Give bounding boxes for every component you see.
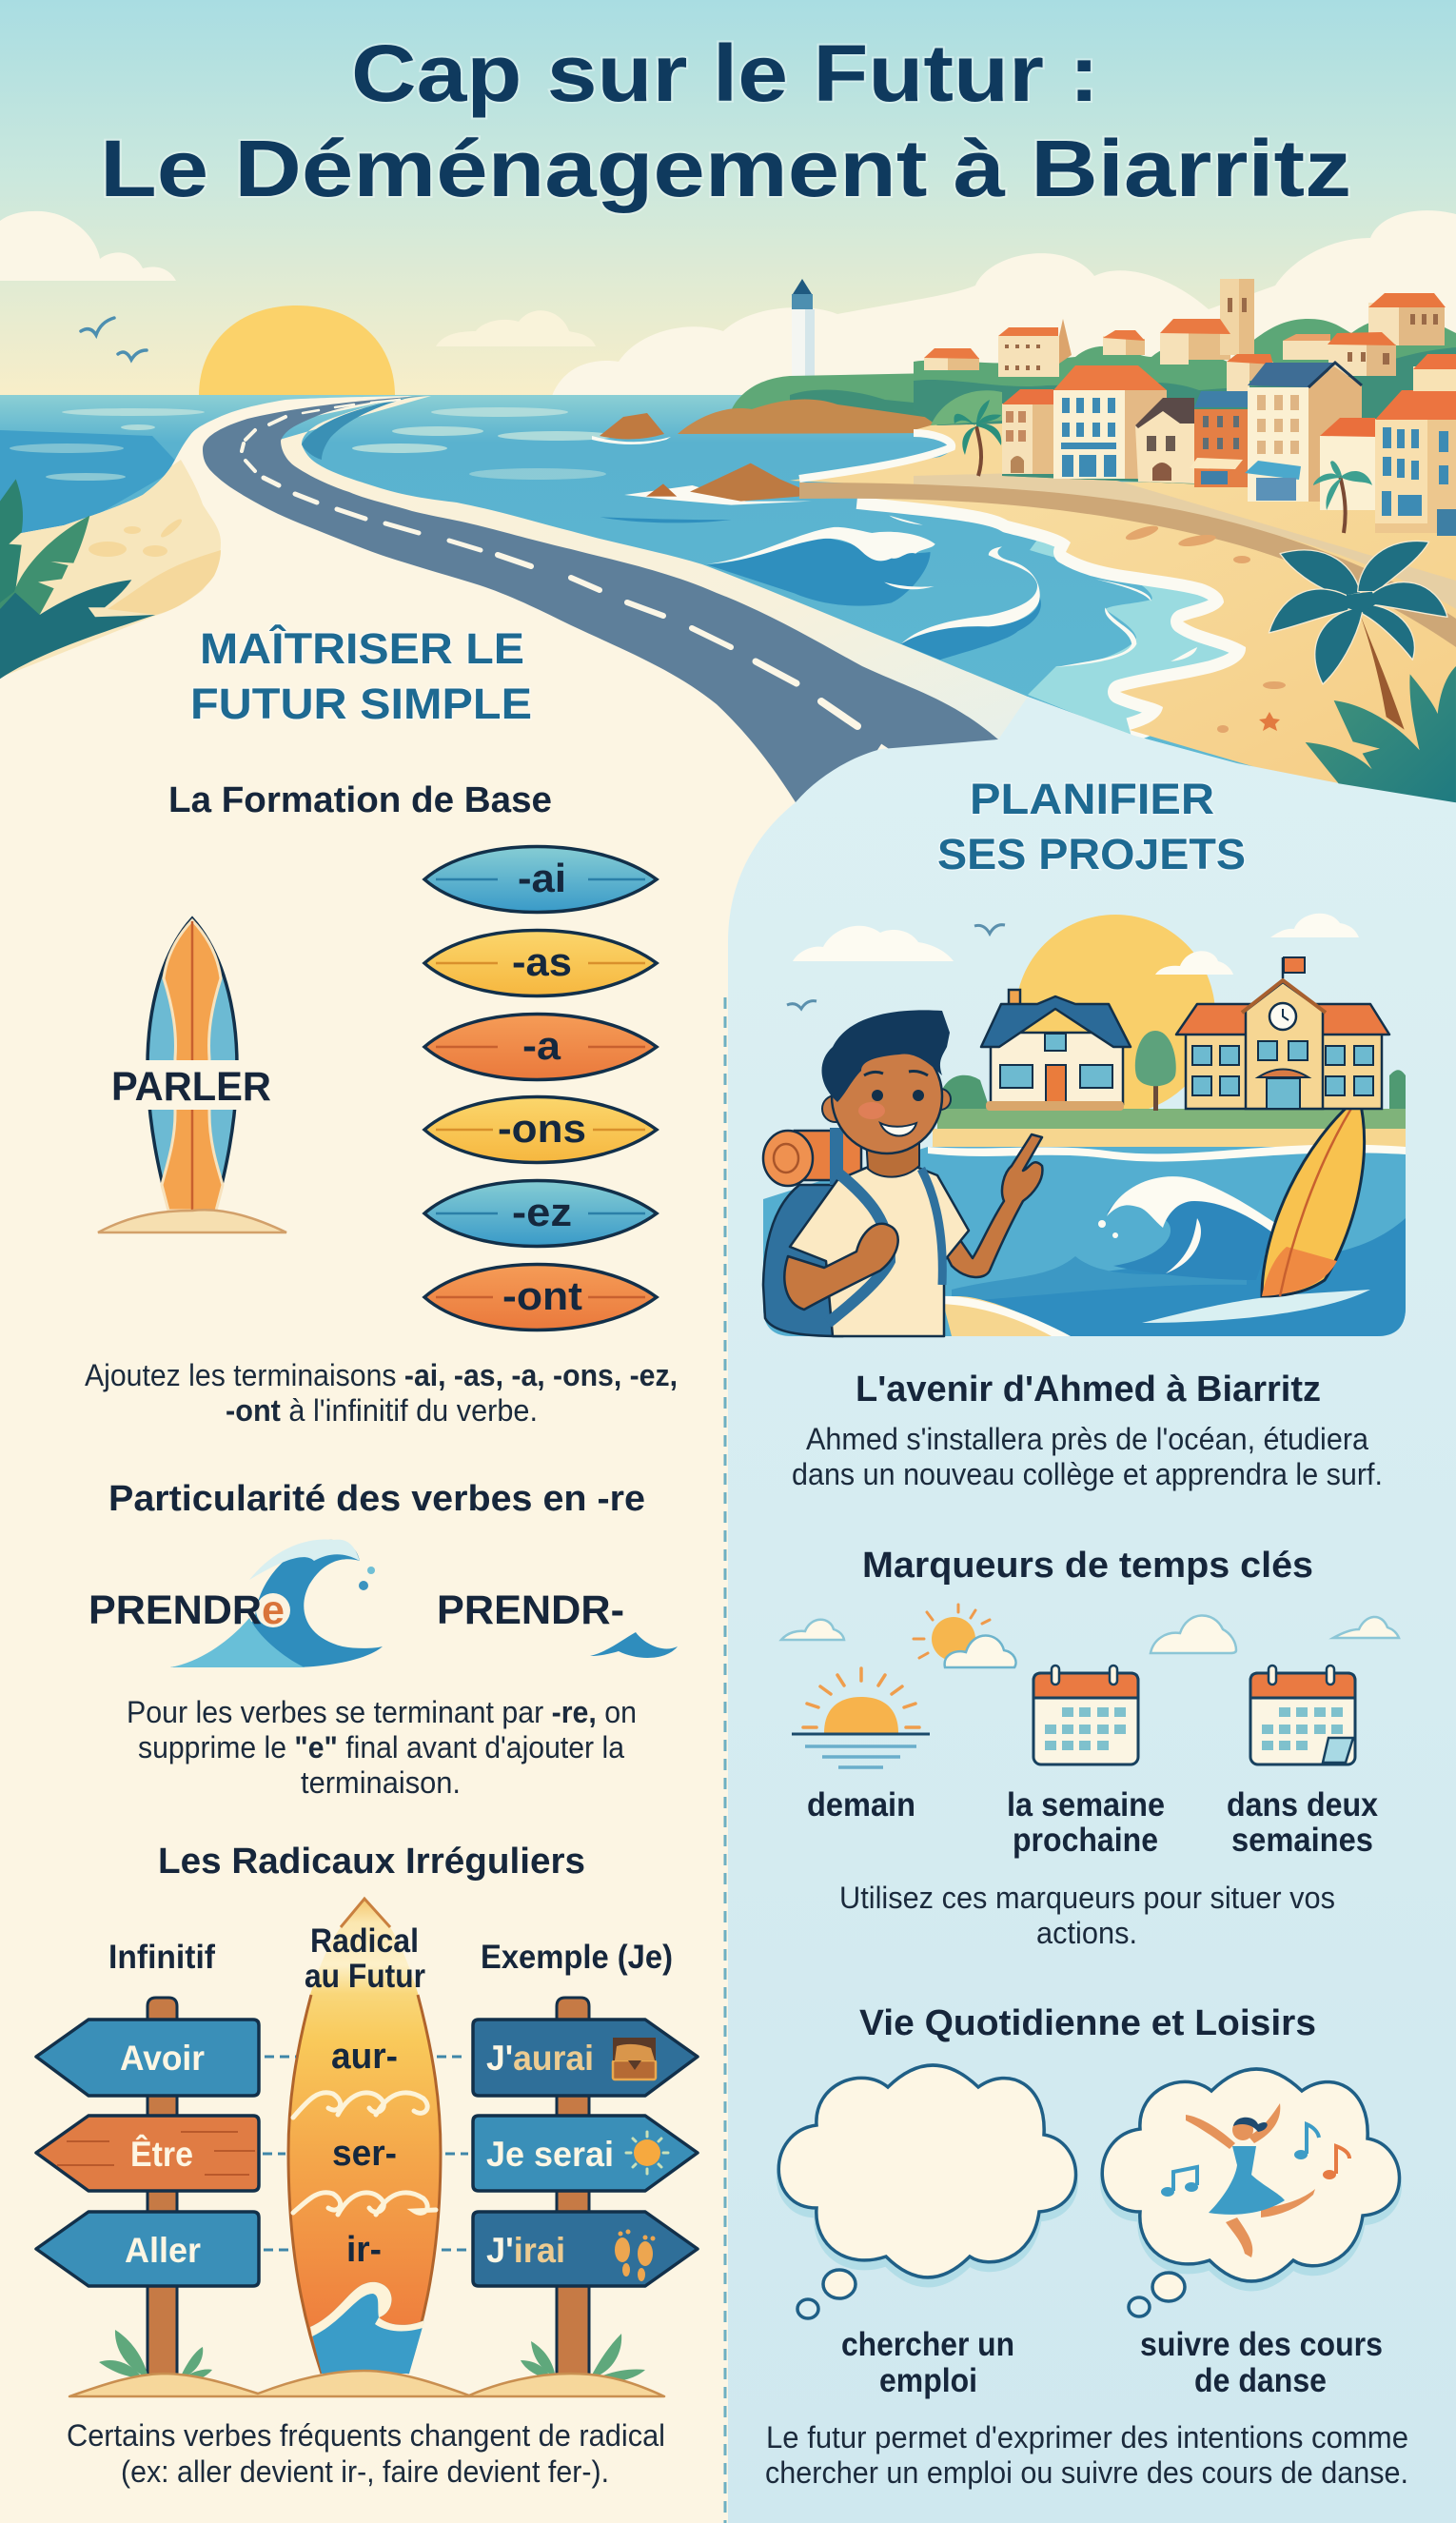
text: markers explanation: actions. xyxy=(1036,1916,1137,1950)
heading: Marqueurs de temps clés: Marqueurs de temps clés xyxy=(862,1546,1313,1586)
wave with PRENDRe: PRENDRe xyxy=(89,1587,285,1633)
central surfboard xyxy=(288,1899,441,2374)
leaves at post bases xyxy=(99,2330,645,2382)
road xyxy=(203,396,998,802)
small wave with PRENDR- xyxy=(437,1587,678,1658)
left arm and hand xyxy=(784,1224,898,1310)
town front row xyxy=(1002,354,1456,536)
hills behind the town xyxy=(914,317,1456,495)
sign: Être xyxy=(36,2116,259,2191)
sky decoration xyxy=(781,1605,1399,1667)
wave band xyxy=(293,2193,436,2215)
radical texts: aur- xyxy=(331,2037,398,2077)
sand dunes xyxy=(69,2371,664,2396)
ending -ai: -ai xyxy=(518,856,566,900)
time marker labels: dans deux xyxy=(1227,1786,1378,1823)
tree xyxy=(1135,1031,1176,1111)
icon: treasure chest xyxy=(613,2038,656,2080)
cream land xyxy=(0,396,796,952)
bubble labels: chercher un xyxy=(841,2326,1014,2363)
text: -re explanation: Pour les verbes se terminant par -re, on xyxy=(127,1695,637,1729)
clouds xyxy=(793,914,1359,975)
pointing arm xyxy=(937,1134,1042,1277)
title: Cap sur le Futur : xyxy=(351,29,1099,118)
icon: sunrise xyxy=(792,1668,930,1767)
column divider xyxy=(723,997,727,2523)
sign: Avoir xyxy=(36,2020,259,2096)
text: Ahmed's future: Ahmed s'installera près de l'océan, étudiera xyxy=(806,1422,1368,1456)
radical texts: ser- xyxy=(332,2134,397,2174)
dancer xyxy=(1186,2103,1315,2257)
text: Ahmed's future xyxy=(792,1422,1383,1491)
text: irregular stems explanation xyxy=(67,2418,665,2489)
white house with blue windows xyxy=(1053,365,1167,479)
column headers: Radical xyxy=(310,1922,419,1960)
head xyxy=(832,1039,942,1153)
headland xyxy=(592,373,980,444)
sun xyxy=(1015,915,1215,1114)
ending -a xyxy=(424,1015,657,1079)
radical texts: ir- xyxy=(346,2230,382,2270)
background clouds xyxy=(0,210,1456,396)
birds xyxy=(787,925,1005,1009)
column headers: Exemple (Je) xyxy=(481,1939,673,1976)
text: formation explanation xyxy=(85,1358,678,1428)
text: -re explanation: supprime le "e" final avant d'ajouter la xyxy=(138,1730,624,1764)
bay sand with foam xyxy=(790,419,1009,490)
text: intentions explanation: chercher un emploi ou suivre des cours de danse. xyxy=(765,2455,1408,2490)
backpack xyxy=(763,1185,842,1336)
shoreline foam xyxy=(857,497,1246,730)
text: -re explanation xyxy=(127,1695,637,1800)
chapel house xyxy=(1135,398,1194,483)
title xyxy=(100,29,1351,213)
thought bubble: dance xyxy=(1102,2069,1399,2316)
orange house xyxy=(1190,391,1248,487)
hair xyxy=(822,1010,950,1102)
music notes xyxy=(1161,2124,1349,2197)
shallow water xyxy=(911,504,1237,738)
right panel background xyxy=(728,697,1456,2523)
diagram: irregular stems xyxy=(36,1899,698,2396)
text: irregular stems explanation: (ex: aller devient ir-, faire devient fer-). xyxy=(121,2454,609,2489)
deeper water on the left xyxy=(0,430,181,571)
yellow corner house xyxy=(1002,389,1053,474)
text: formation explanation: -ont à l'infinitif du verbe. xyxy=(226,1393,538,1428)
sign: Je serai xyxy=(473,2116,698,2191)
text: formation explanation: Ajoutez les terminaisons -ai, -as, -a, -ons, -ez, xyxy=(85,1358,678,1392)
sign: Aller: Aller xyxy=(125,2231,201,2270)
left signpost xyxy=(36,1998,259,2375)
heading: Maîtriser le futur simple xyxy=(190,624,532,728)
heading: Planifier ses projets: SES PROJETS xyxy=(937,830,1246,878)
sign: Être: Être xyxy=(130,2134,193,2174)
road shoulder xyxy=(276,396,1332,790)
icon: calendar next week xyxy=(1033,1666,1138,1764)
dashed connectors xyxy=(263,2057,468,2250)
road centre dashes xyxy=(242,400,894,757)
heading: Planifier ses projets xyxy=(937,775,1246,878)
wave xyxy=(1098,1176,1275,1280)
sign: J'aurai xyxy=(473,2020,698,2096)
right signpost xyxy=(473,1998,698,2375)
right-side houses xyxy=(1320,354,1456,536)
lighthouse xyxy=(792,279,815,378)
icon: footprints xyxy=(615,2229,655,2281)
sand details xyxy=(1124,523,1286,733)
heading: La Formation de Base: La Formation de Base xyxy=(168,780,552,820)
time marker labels: la semaine xyxy=(1007,1786,1165,1823)
small wave with PRENDR-: PRENDR- xyxy=(437,1587,624,1633)
ending -ez: -ez xyxy=(512,1190,572,1234)
big palm xyxy=(1269,541,1447,730)
title: Le Déménagement à Biarritz xyxy=(100,124,1351,213)
ending -as xyxy=(424,931,657,995)
ground and sea xyxy=(763,1070,1406,1336)
right corner plant xyxy=(1306,666,1456,802)
sign: J'irai xyxy=(473,2212,698,2286)
left leaves xyxy=(0,479,155,679)
sign: Aller xyxy=(36,2212,259,2286)
icon: sun xyxy=(626,2132,668,2174)
ending -ons xyxy=(424,1096,657,1163)
sea highlights xyxy=(10,407,616,481)
time marker labels xyxy=(807,1786,1378,1859)
sign: J'irai: J'irai xyxy=(486,2231,565,2270)
icon: calendar in two weeks xyxy=(1250,1666,1355,1764)
text: markers explanation: Utilisez ces marqueurs pour situer vos xyxy=(839,1881,1335,1915)
icon: setting sun xyxy=(199,306,395,396)
bubble labels: suivre des cours xyxy=(1140,2326,1383,2363)
bedroll xyxy=(763,1128,861,1186)
text: intentions explanation: Le futur permet d'exprimer des intentions comme xyxy=(766,2420,1408,2454)
promenade xyxy=(799,471,1456,647)
surfboard: PARLER xyxy=(98,918,286,1232)
text: -re explanation: terminaison. xyxy=(301,1765,461,1800)
text: Ahmed's future: dans un nouveau collège et apprendra le surf. xyxy=(792,1457,1383,1491)
bay waves and rocks xyxy=(600,463,1197,667)
Ahmed character xyxy=(763,1010,1042,1336)
ending -ez xyxy=(424,1180,657,1247)
beach xyxy=(799,481,1456,802)
heading: Vie Quotidienne et Loisirs: Vie Quotidienne et Loisirs xyxy=(859,2003,1316,2043)
straps xyxy=(828,1173,890,1323)
surfboard: PARLER: PARLER xyxy=(111,1064,271,1110)
ending -ont: -ont xyxy=(502,1273,582,1318)
sign: Je serai: Je serai xyxy=(486,2135,614,2174)
time marker labels: demain xyxy=(807,1786,915,1823)
ending -ont xyxy=(424,1264,657,1330)
heading: Maîtriser le futur simple: MAÎTRISER LE xyxy=(200,624,524,673)
column headers: Infinitif xyxy=(108,1939,215,1976)
school xyxy=(1176,957,1389,1109)
sky background xyxy=(0,0,1456,400)
time marker labels: semaines xyxy=(1231,1822,1373,1859)
neck xyxy=(866,1137,919,1177)
bubble labels: emploi xyxy=(879,2362,977,2399)
column headers: au Futur xyxy=(305,1958,425,1995)
heading: Les Radicaux Irréguliers: Les Radicaux Irréguliers xyxy=(158,1842,585,1882)
wave with PRENDRe xyxy=(89,1539,383,1667)
ending -as: -as xyxy=(512,939,572,984)
text: intentions explanation xyxy=(765,2420,1408,2490)
ending -a: -a xyxy=(522,1023,561,1068)
sand patch left xyxy=(0,460,221,678)
bubble labels xyxy=(841,2326,1383,2399)
sand mound xyxy=(98,1210,286,1232)
heading: L'avenir d'Ahmed à Biarritz: L'avenir d'Ahmed à Biarritz xyxy=(856,1370,1321,1409)
thought bubble: job xyxy=(778,2065,1075,2318)
birds xyxy=(81,318,147,360)
tall blue-roof house xyxy=(1245,363,1362,502)
endings surfboards xyxy=(424,847,657,1330)
column headers xyxy=(108,1922,673,1995)
town back row xyxy=(924,279,1446,392)
sign: Avoir: Avoir xyxy=(120,2039,205,2078)
text: markers explanation xyxy=(839,1881,1335,1950)
house xyxy=(981,990,1131,1111)
ending -ons: -ons xyxy=(498,1106,586,1151)
surfboard xyxy=(1262,1096,1365,1296)
heading: Particularité des verbes en -re: Particularité des verbes en -re xyxy=(108,1479,645,1519)
wave band xyxy=(293,2093,427,2118)
ears xyxy=(822,1089,951,1122)
radical texts xyxy=(331,2037,398,2270)
blue wave tail xyxy=(310,2282,424,2374)
text: irregular stems explanation: Certains verbes fréquents changent de radical xyxy=(67,2418,665,2453)
small palms in town xyxy=(954,400,1372,533)
ending -ai xyxy=(424,847,657,912)
left panel background xyxy=(0,942,728,2523)
illustration: Ahmed in Biarritz xyxy=(763,914,1406,1336)
heading: Maîtriser le futur simple: FUTUR SIMPLE xyxy=(190,680,532,728)
torso xyxy=(790,1166,969,1336)
bubble labels: de danse xyxy=(1194,2362,1327,2399)
sea xyxy=(0,395,1456,871)
icon: sun behind cloud xyxy=(914,1605,1016,1667)
heading: Planifier ses projets: PLANIFIER xyxy=(970,775,1214,823)
sign: J'aurai: J'aurai xyxy=(486,2039,594,2078)
time marker labels: prochaine xyxy=(1013,1822,1158,1859)
deep water beside the road xyxy=(302,397,412,460)
face xyxy=(872,1090,883,1101)
